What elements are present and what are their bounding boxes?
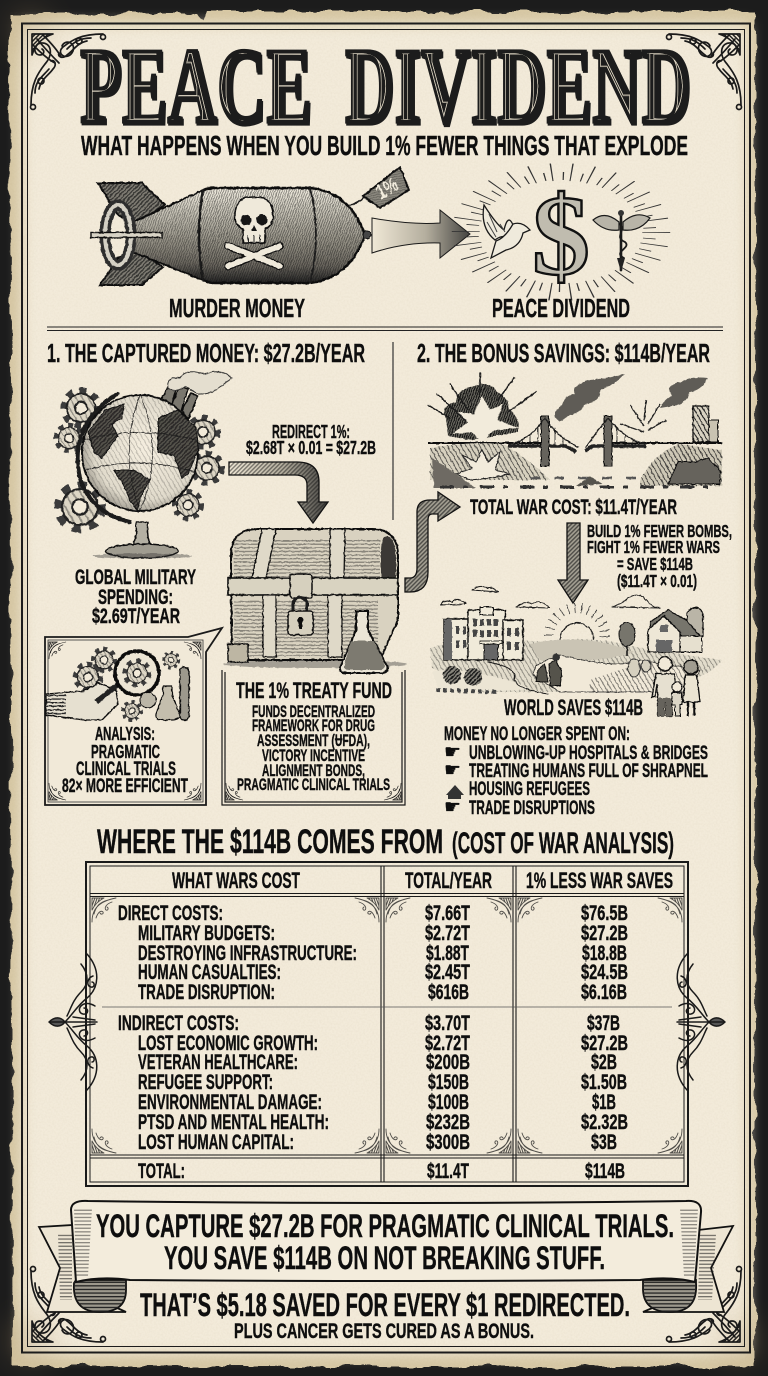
callout: redirect formula: REDIRECT 1%: [272,422,350,442]
text: analysis: CLINICAL TRIALS [76,759,176,780]
arrow: bomb to dividend [372,210,470,258]
table: direct costs: $2.45T [425,961,470,984]
icon: dollar with dove and caduceus: $ [532,172,590,299]
banner ribbon [39,1201,733,1312]
list item: trade: TRADE DISRUPTIONS [469,798,595,819]
arrow: chest to war cost [405,492,460,592]
table: indirect costs: VETERAN HEALTHCARE: [138,1051,298,1074]
table: direct costs: $7.66T [425,902,470,925]
table: indirect costs: $37B [587,1012,620,1035]
text: treaty fund description: ASSESSMENT (ɄFDA), [257,731,370,750]
table: direct costs: MILITARY BUDGETS: [138,922,275,945]
text: analysis: PRAGMATIC [91,742,160,762]
table: direct costs: $1.88T [426,942,469,965]
table: direct costs: DESTROYING INFRASTRUCTURE: [138,942,357,965]
table: indirect costs: $2.32B [581,1111,628,1134]
text: treaty fund description: ALIGNMENT BONDS, [262,761,365,780]
icon: bomb with skull and price tag [91,167,409,285]
label: world saves: WORLD SAVES $114B [504,695,643,720]
icon: dollar with dove and caduceus [466,172,656,299]
heading: where the $114B comes from: WHERE THE $114B COMES FROM [97,823,443,861]
table: indirect costs: $2.72T [425,1032,470,1055]
table header row: TOTAL/YEAR [405,868,492,893]
table: indirect costs: LOST ECONOMIC GROWTH: [138,1032,318,1055]
table: total row: TOTAL: [138,1160,185,1183]
title: PEACE [80,27,312,146]
list item: shrapnel [444,759,708,782]
table: indirect costs: $300B [426,1131,470,1154]
panel: the captured money [39,338,733,1343]
table header row: WHAT WARS COST [172,868,300,893]
callout: redirect formula: $2.68T × 0.01 = $27.2B [246,438,376,458]
label: global military spending: $2.69T/YEAR [92,605,180,628]
table: indirect costs: ENVIRONMENTAL DAMAGE: [138,1091,322,1114]
illustration: family [652,657,700,716]
text: treaty fund description: FUNDS DECENTRALIZED [252,702,375,721]
text: savings formula [587,521,732,591]
banner text [96,1208,674,1276]
table: direct costs: $2.72T [425,922,470,945]
table: indirect costs: $2B [591,1051,617,1074]
text: treaty fund description: PRAGMATIC CLINICAL TRIALS [237,775,390,794]
table: indirect costs [118,1012,628,1154]
list: money no longer spent on: MONEY NO LONGER SPENT ON: [444,724,630,745]
icon: hand with magnifier, gears and flasks [46,649,189,720]
table: total row [138,1160,625,1183]
table: direct costs [118,902,628,1004]
table: direct costs: $24.5B [581,961,628,984]
table: direct costs: HUMAN CASUALTIES: [138,961,281,984]
table side ornaments [49,954,725,1090]
table: direct costs: $6.16B [581,981,627,1004]
text: savings formula: ($11.4T × 0.01) [617,571,697,591]
table: total row: $114B [585,1160,625,1183]
panel: analysis callout [45,628,222,805]
label: global military spending: GLOBAL MILITARY [75,566,196,589]
table header row: 1% LESS WAR SAVES [526,868,673,893]
label: peace dividend: PEACE DIVIDEND [492,293,630,323]
table: indirect costs: $200B [426,1051,470,1074]
illustration: peaceful town and farm [430,586,722,694]
table: direct costs: $616B [428,981,469,1004]
panel: cost of war table [86,862,688,1186]
table: indirect costs: $27.2B [581,1032,628,1055]
list item: refugees: HOUSING REFUGEES [469,779,590,800]
table: indirect costs: $150B [428,1071,469,1094]
list: money no longer spent on [444,724,708,819]
table: indirect costs: $3.70T [425,1012,470,1035]
table: direct costs: $27.2B [581,922,628,945]
table: indirect costs: LOST HUMAN CAPITAL: [138,1131,294,1154]
table: direct costs: DIRECT COSTS: [118,902,223,925]
list item: hospitals and bridges [444,741,708,764]
text: treaty fund description: VICTORY INCENTIVE [262,746,365,765]
table: direct costs: TRADE DISRUPTION: [138,981,275,1004]
heading: section 1: 1. THE CAPTURED MONEY: $27.2B/YEAR [47,338,365,368]
table: indirect costs: REFUGEE SUPPORT: [138,1071,273,1094]
text: analysis [62,724,188,797]
table header row [172,868,673,893]
text: treaty fund description [237,702,390,794]
icon: bomb with skull and price tag: 1% [372,173,403,204]
list item: trade [444,796,595,819]
table: indirect costs: $100B [428,1091,469,1114]
callout: redirect formula [246,422,376,458]
list item: refugees [446,779,590,800]
table: indirect costs: $3B [591,1131,617,1154]
illustration: war destruction [428,373,722,488]
table: indirect costs: PTSD AND MENTAL HEALTH: [138,1111,329,1134]
text: analysis: ANALYSIS: [95,724,155,744]
panel: the 1% treaty fund [222,670,405,805]
text: savings formula: = SAVE $114B [617,554,693,574]
text: treaty fund title: THE 1% TREATY FUND [236,678,392,703]
table: direct costs: $76.5B [581,902,628,925]
icon: treasure chest with flask [223,529,407,673]
panel: the bonus savings [417,338,732,819]
text: treaty fund description: FRAMEWORK FOR DRUG [252,716,375,735]
table: direct costs: $18.8B [582,942,627,965]
label: murder money: MURDER MONEY [169,293,305,323]
table: indirect costs: INDIRECT COSTS: [118,1012,239,1035]
table: indirect costs: $232B [426,1111,470,1134]
icon: globe with factory and gears [56,372,232,558]
bonus line: PLUS CANCER GETS CURED AS A BONUS. [234,1320,534,1343]
table: total row: $11.4T [427,1160,469,1183]
label: global military spending: SPENDING: [98,586,173,609]
text: analysis: 82× MORE EFFICIENT [62,776,188,797]
table: indirect costs: $1.50B [581,1071,627,1094]
table: indirect costs: $1B [592,1091,616,1114]
arrow: war cost down to savings [558,523,588,603]
arrow: redirect down to chest [229,462,328,523]
label: global military spending [75,566,196,628]
